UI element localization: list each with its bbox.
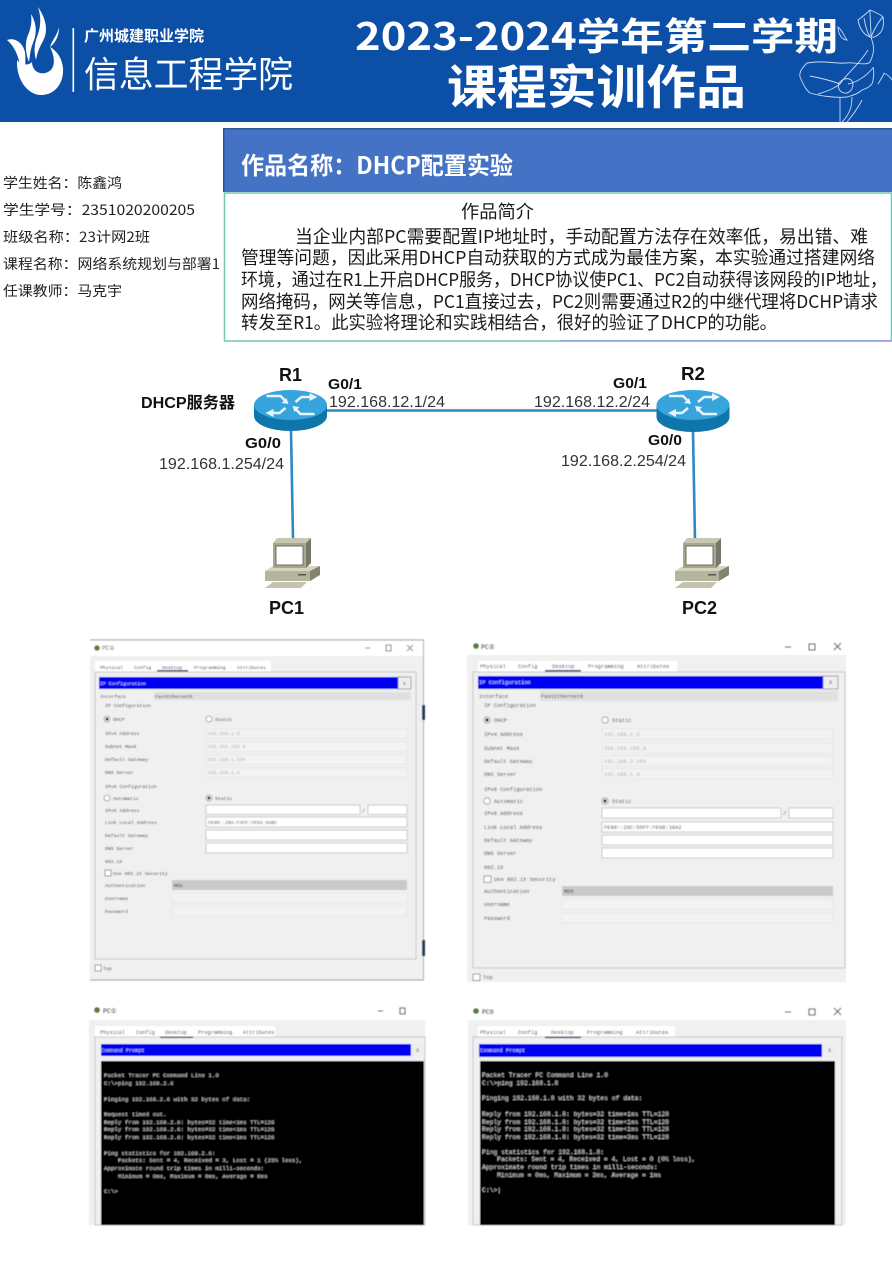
screenshot: PC2 IP configuration: Use 802.1X Security: [494, 877, 556, 883]
screenshot: PC1 IP configuration: PC①: [102, 645, 115, 652]
screenshot: PC2 ping result: [468, 1008, 846, 1225]
screenshot: PC2 ping result: C:\>|: [482, 1187, 501, 1194]
screenshot: PC1 IP configuration: Top: [103, 966, 112, 972]
introduction paragraph: 当企业内部PC需要配置IP地址时，手动配置方法存在效率低，易出错、难: [295, 223, 868, 249]
screenshot: PC2 IP configuration: Link Local Address: [484, 825, 542, 831]
screenshot: PC2 ping result: Ping statistics for 192.168.1.8:: [482, 1149, 604, 1156]
network labels: R1: [279, 365, 302, 385]
icon: router R1: [254, 390, 327, 431]
screenshot: PC1 IP configuration: Default Gateway: [105, 833, 148, 839]
screenshot: PC2 ping result: X: [828, 1048, 832, 1054]
student info list: 课程名称：网络系统规划与部署1: [3, 254, 220, 274]
college name: 广州城建职业学院: [84, 25, 204, 46]
student info list: [3, 173, 220, 301]
screenshot: PC2 ping result: Pinging 192.168.1.8 with 32 bytes of data:: [482, 1095, 642, 1102]
screenshot: PC1 ping result: Reply from 192.168.2.6: bytes=32 time<1ms TTL=126: [104, 1134, 275, 1141]
screenshot: PC1 IP configuration: IP Configuration: [100, 681, 146, 687]
screenshot: PC1 IP configuration: Physical: [100, 665, 123, 671]
screenshot: PC2 IP configuration: Attributes: [637, 664, 669, 670]
title line 2: 课程实训作品: [447, 49, 746, 118]
icon: lotus outline: [800, 10, 892, 122]
screenshot: PC1 IP configuration: DNS Server: [105, 770, 134, 776]
screenshot: PC2 IP configuration: X: [829, 680, 833, 686]
screenshot: PC2 ping result: Config: [518, 1030, 537, 1036]
screenshot: PC2 IP configuration: Interface: [479, 694, 508, 700]
screenshot: PC1 ping result: PC①: [103, 1007, 117, 1015]
screenshot: PC1 ping result: Packets: Sent = 4, Received = 3, Lost = 1 (25% loss),: [118, 1157, 302, 1164]
screenshot: PC1 IP configuration: Programming: [194, 665, 226, 671]
icon: computer PC1: [265, 538, 320, 588]
screenshot: PC1 IP configuration: X: [403, 681, 406, 687]
screenshot: PC2 ping result: Approximate round trip times in milli-seconds:: [482, 1164, 658, 1171]
screenshot: PC1 IP configuration: Automatic: [113, 796, 139, 802]
introduction paragraph: [241, 223, 887, 335]
screenshot: PC2 ping result: Reply from 192.168.1.8: bytes=32 time=3ms TTL=128: [482, 1134, 669, 1141]
screenshot: PC1 IP configuration: 192.168.1.4: [208, 770, 240, 776]
screenshot: PC1 ping result: X: [416, 1048, 420, 1054]
screenshot: PC2 IP configuration: Config: [518, 664, 537, 670]
network labels: G0/0: [648, 432, 682, 449]
screenshot: PC2 IP configuration: IP Configuration: [479, 680, 531, 686]
panel: work title: 作品名称：DHCP配置实验: [241, 146, 513, 181]
screenshot: PC2 ping result: Reply from 192.168.1.8: bytes=32 time=1ms TTL=128: [482, 1111, 669, 1118]
screenshot: PC1 ping result: C:\>: [104, 1188, 118, 1195]
screenshot: PC1 IP configuration: DHCP: [113, 717, 125, 723]
screenshot: PC2 ping result: Reply from 192.168.1.8: bytes=32 time<1ms TTL=128: [482, 1119, 669, 1126]
school name: 信息工程学院: [84, 46, 293, 98]
network labels: DHCP服务器: [141, 393, 235, 412]
icon: computer PC2: [675, 538, 729, 588]
screenshot: PC2 IP configuration: DHCP: [494, 718, 507, 724]
icon: router R2: [656, 390, 730, 432]
screenshot: PC1 IP configuration: IP Configuration: [105, 703, 151, 709]
screenshot: PC1 ping result: [89, 1007, 425, 1225]
header banner: [0, 0, 892, 122]
introduction heading: 作品简介: [461, 198, 534, 224]
student info list: 任课教师：马克宇: [3, 281, 122, 301]
screenshot: PC1 ping result: Request timed out.: [104, 1111, 167, 1118]
screenshot: PC1 IP configuration: Desktop: [162, 665, 182, 671]
screenshot: PC2 IP configuration: DNS Server: [484, 772, 516, 778]
screenshot: PC1 ping result: Packet Tracer PC Command Line 1.0: [104, 1072, 219, 1079]
screenshot: PC2 ping result: Minimum = 0ms, Maximum = 3ms, Average = 1ms: [497, 1172, 661, 1179]
panel: work title: [223, 128, 892, 192]
screenshot: PC1 IP configuration: [90, 640, 425, 980]
screenshot: PC1 ping result: Approximate round trip times in milli-seconds:: [104, 1165, 264, 1172]
screenshot: PC1 IP configuration: Attributes: [237, 665, 266, 671]
student info list: 学生姓名：陈鑫鸿: [3, 173, 122, 193]
screenshot: PC2 IP configuration: Static: [612, 799, 631, 805]
screenshot: PC2 IP configuration: FE80::20C:55FF:FE08:16A2: [604, 825, 682, 831]
screenshot: PC1 ping result: C:\>ping 192.168.2.6: [104, 1080, 174, 1087]
screenshot: PC1 ping result: Programming: [198, 1030, 232, 1036]
screenshot: PC2 ping result: Packets: Sent = 4, Received = 4, Lost = 0 (0% loss),: [497, 1156, 695, 1163]
network labels: R2: [681, 364, 705, 384]
screenshot: PC2 ping result: Attributes: [636, 1030, 668, 1036]
network labels: 192.168.1.254/24: [159, 456, 284, 473]
links: [291, 410, 695, 540]
screenshot: PC1 IP configuration: 802.1X: [105, 859, 122, 865]
screenshot: PC1 ping result: Config: [136, 1030, 155, 1036]
screenshot: PC1 ping result: Ping statistics for 192.168.2.6:: [104, 1150, 215, 1157]
screenshot: PC1 IP configuration: Username: [105, 896, 128, 902]
network labels: G0/0: [245, 435, 281, 452]
screenshot: PC2 ping result: Command Prompt: [480, 1048, 525, 1054]
network labels: 192.168.2.254/24: [561, 453, 686, 470]
screenshot: PC2 IP configuration: [467, 643, 846, 982]
screenshot: PC2 IP configuration: Default Gateway: [484, 838, 533, 844]
icon: college flame logo: [7, 7, 74, 95]
network labels: PC2: [682, 598, 717, 618]
network labels: G0/1: [328, 376, 362, 393]
introduction paragraph: 网络掩码，网关等信息，PC1直接过去，PC2则需要通过R2的中继代理将DCHP请求: [241, 288, 878, 314]
screenshot: PC2 ping result: Physical: [480, 1030, 506, 1036]
screenshot: PC1 IP configuration: /: [362, 808, 365, 814]
screenshot: PC1 ping result: Minimum = 0ms, Maximum = 0ms, Average = 0ms: [118, 1173, 268, 1180]
screenshot: PC1 IP configuration: IPv6 Configuration: [105, 784, 157, 790]
screenshot: PC1 IP configuration: Static: [215, 717, 232, 723]
screenshot: PC1 ping result: Reply from 192.168.2.6: bytes=32 time<1ms TTL=126: [104, 1119, 275, 1126]
screenshot: PC2 IP configuration: Physical: [480, 664, 506, 670]
student info list: 班级名称：23计网2班: [3, 227, 150, 247]
screenshot: PC1 IP configuration: Default Gateway: [105, 757, 148, 763]
screenshot: PC1 IP configuration: Subnet Mask: [105, 744, 137, 750]
screenshot: PC2 ping result: Packet Tracer PC Command Line 1.0: [482, 1072, 608, 1079]
screenshot: PC1 IP configuration: DNS Server: [105, 846, 134, 852]
screenshot: PC1 IP configuration: Config: [134, 665, 151, 671]
screenshot: PC1 IP configuration: Interface: [100, 694, 126, 700]
screenshot: PC2 IP configuration: Subnet Mask: [484, 746, 520, 752]
introduction paragraph: 管理等问题，因此采用DHCP自动获取的方式成为最佳方案，本实验通过搭建网络: [241, 244, 875, 270]
screenshot: PC2 IP configuration: Desktop: [552, 664, 575, 670]
introduction paragraph: 转发至R1。此实验将理论和实践相结合，很好的验证了DHCP的功能。: [241, 309, 777, 335]
screenshot: PC1 IP configuration: 192.168.1.254: [208, 757, 246, 763]
screenshot: PC1 ping result: Physical: [100, 1030, 125, 1036]
network labels: G0/1: [613, 375, 647, 392]
screenshot: PC1 ping result: Desktop: [165, 1030, 187, 1036]
panel: work introduction: [224, 193, 892, 342]
screenshot: PC2 IP configuration: Password: [484, 916, 510, 922]
network labels: PC1: [269, 598, 304, 618]
screenshot: PC1 IP configuration: Authentication: [105, 883, 145, 889]
screenshot: PC2 IP configuration: Programming: [588, 664, 624, 670]
screenshot: PC2 IP configuration: IP Configuration: [484, 703, 536, 709]
screenshot: PC2 ping result: PC0: [482, 1009, 494, 1016]
screenshot: PC1 IP configuration: Static: [215, 796, 232, 802]
screenshot: PC2 IP configuration: Authentication: [484, 889, 529, 895]
screenshot: PC2 IP configuration: 192.168.2.254: [604, 759, 646, 765]
student info list: 学生学号：2351020200205: [3, 200, 195, 220]
title line 1: 2023-2024学年第二学期: [355, 6, 838, 61]
screenshot: PC2 IP configuration: 192.168.2.6: [604, 732, 640, 738]
screenshot: PC2 IP configuration: MD5: [564, 889, 574, 895]
screenshot: PC1 ping result: Command Prompt: [101, 1048, 145, 1054]
screenshot: PC1 IP configuration: MD5: [174, 883, 183, 889]
network labels: 192.168.12.1/24: [329, 394, 445, 411]
screenshot: PC1 IP configuration: Link Local Address: [105, 820, 157, 826]
screenshot: PC1 IP configuration: FE80::20A:F3FF:FE55:8ABC: [208, 820, 277, 826]
screenshot: PC1 IP configuration: Use 802.1X Security: [113, 871, 168, 877]
screenshot: PC2 IP configuration: 255.255.255.0: [604, 746, 646, 752]
screenshot: PC1 IP configuration: IPv6 Address: [105, 808, 140, 814]
screenshot: PC1 ping result: Attributes: [243, 1030, 274, 1036]
network topology diagram: [141, 364, 730, 618]
screenshot: PC1 ping result: Pinging 192.168.2.6 with 32 bytes of data:: [104, 1096, 250, 1103]
screenshot: PC2 IP configuration: Default Gateway: [484, 759, 533, 765]
screenshot: PC2 IP configuration: 802.1X: [484, 865, 504, 871]
screenshot: PC1 IP configuration: 255.255.255.0: [208, 744, 246, 750]
screenshot: PC2 IP configuration: /: [783, 811, 786, 817]
screenshot: PC2 IP configuration: 192.168.1.4: [604, 772, 640, 778]
screenshot: PC2 IP configuration: Top: [483, 975, 493, 981]
screenshot: PC2 IP configuration: IPv6 Address: [484, 811, 523, 817]
screenshot: PC2 IP configuration: Automatic: [494, 799, 523, 805]
network labels: 192.168.12.2/24: [534, 394, 650, 411]
screenshot: PC2 ping result: Reply from 192.168.1.8: bytes=32 time<1ms TTL=128: [482, 1126, 669, 1133]
screenshot: PC1 IP configuration: 192.168.1.8: [208, 731, 240, 737]
screenshot: PC2 IP configuration: IPv6 Configuration: [484, 787, 542, 793]
screenshot: PC2 IP configuration: PC②: [481, 643, 495, 651]
screenshot: PC2 ping result: Programming: [587, 1030, 623, 1036]
screenshot: PC1 IP configuration: Password: [105, 909, 128, 915]
screenshot: PC2 IP configuration: FastEthernet0: [541, 694, 583, 700]
screenshot: PC1 ping result: Reply from 192.168.2.6: bytes=32 time<1ms TTL=126: [104, 1126, 275, 1133]
screenshot: PC2 IP configuration: Static: [612, 718, 631, 724]
network labels: [141, 364, 717, 618]
screenshot: PC2 ping result: C:\>ping 192.168.1.8: [482, 1080, 559, 1087]
screenshot: PC2 IP configuration: DNS Server: [484, 851, 516, 857]
screenshot: PC2 ping result: Desktop: [551, 1030, 574, 1036]
screenshot: PC2 IP configuration: Username: [484, 902, 510, 908]
screenshot: PC1 IP configuration: IPv4 Address: [105, 731, 140, 737]
screenshot: PC2 IP configuration: IPv4 Address: [484, 732, 523, 738]
screenshot: PC1 IP configuration: FastEthernet0: [155, 694, 193, 700]
